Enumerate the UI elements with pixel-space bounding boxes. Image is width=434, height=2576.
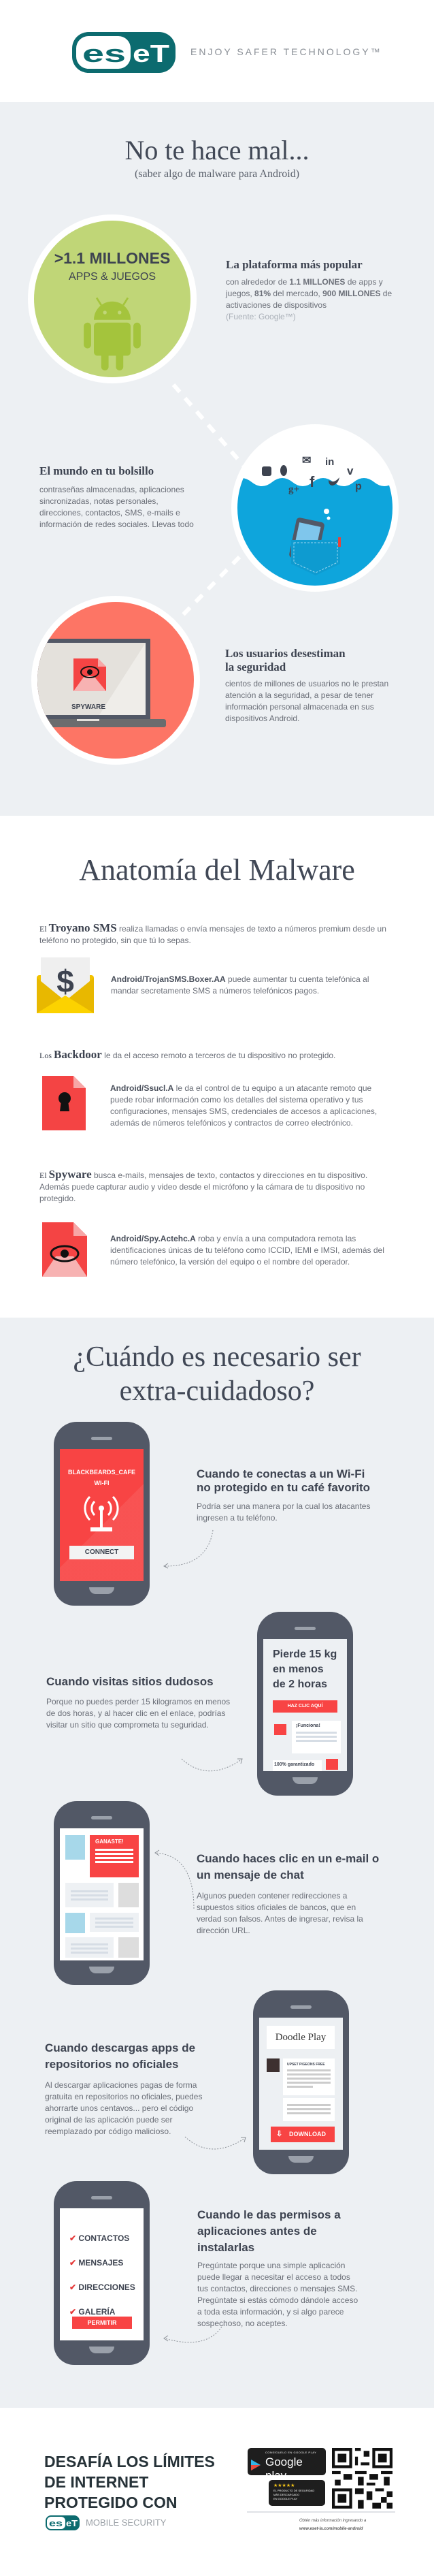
circle: pocket with social icons: ✉ <box>302 455 311 466</box>
text: repositorios: Cuando descargas apps de repositorios no oficiales <box>45 2041 195 2071</box>
title: Anatomía del Malware: Anatomía del Malware <box>79 853 355 887</box>
circle: spyware laptop <box>31 596 200 765</box>
logo badge: es <box>82 39 126 67</box>
footer url text: Obtén más información ingresando a <box>299 2519 366 2523</box>
phone 4: doodle play: ⇩ <box>276 2130 282 2138</box>
rating badge: ★★★★★ <box>273 2483 295 2488</box>
text: wifi <box>197 1467 370 1523</box>
footer: eset mobile security <box>46 2515 166 2530</box>
circle: android apps <box>28 214 197 383</box>
block: backdoor: Android/Ssucl.A le da el control de tu equipo a un atacante remoto que puede robar información como los detalles del sistema operativo y tus configuraciones, mensajes SMS, credenciales de accesos a aplicaciones, además de números telefónicos y contractos de correo electrónico. <box>110 1083 377 1128</box>
dashed connectors <box>172 383 243 616</box>
footer: headline: DE INTERNET <box>44 2473 148 2491</box>
circle: spyware laptop: SPYWARE <box>71 703 105 711</box>
text: email: Algunos pueden contener redirecciones a supuestos sitios oficiales de bancos, que en verdad son falsos. Antes de ingresar, revisa la dirección URL. <box>197 1891 363 1935</box>
google play badge: CONSÍGUELO EN GOOGLE PLAY <box>265 2451 316 2454</box>
circle: pocket with social icons: v <box>347 464 354 477</box>
title: cuando es necesario <box>73 1341 361 1407</box>
phone 2: sitios dudosos: ¡Funciona! <box>296 1723 320 1728</box>
phone 2: sitios dudosos: de 2 horas <box>273 1679 327 1690</box>
footer: headline <box>44 2453 215 2511</box>
block: spyware: Android/Spy.Actehc.A roba y envía a una computadora remota las identificaciones únicas de tu teléfono como ICCID, IEMI e IMSI, además del número telefónico, la versión del equipo o el nombre del operador. <box>110 1234 384 1267</box>
block: troyano sms: Android/TrojanSMS.Boxer.AA puede aumentar tu cuenta telefónica al mandar secretamente SMS a números telefónicos pagos. <box>111 974 369 996</box>
text: plataforma mas popular: (Fuente: Google™) <box>226 312 296 321</box>
phone 5: permisos: ✔ DIRECCIONES <box>69 2283 135 2292</box>
title: cuando es necesario: ¿Cuándo es necesario ser <box>73 1341 361 1373</box>
block: backdoor: Los Backdoor le da el acceso remoto a terceros de tu dispositivo no protegido. <box>39 1048 335 1061</box>
text: email <box>197 1852 379 1935</box>
text: permisos <box>197 2208 358 2328</box>
rating badge: EL PRODUCTO DE SEGURIDAD <box>273 2489 314 2492</box>
phone 5: permisos: ✔ MENSAJES <box>69 2258 123 2268</box>
icon: envelope with dollar: $ <box>56 964 74 999</box>
rating badge: EN GOOGLE PLAY <box>273 2497 297 2500</box>
phone 3: email: GANASTE! <box>95 1839 124 1845</box>
text: sitios dudosos: Porque no puedes perder 15 kilogramos en menos de dos horas, y al hacer clic en el enlace, podrías visitar un sitio que comprometa tu seguridad. <box>46 1697 230 1730</box>
text: sitios dudosos <box>46 1675 230 1730</box>
footer url text: www.eset-la.com/mobile-android <box>299 2527 363 2531</box>
title: No te hace mal: No te hace mal... <box>125 135 309 165</box>
phone 4: doodle play: Doodle Play <box>276 2032 326 2043</box>
qr code <box>332 2448 393 2509</box>
footer: eset mobile security: es <box>49 2518 63 2528</box>
phone 4: doodle play: UPSET PIGEONS FREE <box>287 2063 325 2067</box>
phone 1: wifi: WI-FI <box>94 1480 109 1486</box>
arrow 3 <box>154 1849 195 1909</box>
rating badge <box>269 2480 325 2506</box>
circle: pocket with social icons: p <box>355 481 362 492</box>
phone 1: wifi: CONNECT <box>85 1548 118 1556</box>
phone 2: sitios dudosos: 100% garantizado <box>274 1762 314 1767</box>
arrow 2 <box>181 1758 243 1772</box>
footer divider line <box>247 2511 395 2513</box>
icon: red file with keyhole <box>42 1076 86 1130</box>
footer url text <box>299 2518 366 2531</box>
circle: android apps: APPS & JUEGOS <box>69 271 156 283</box>
phone 2: sitios dudosos: Pierde 15 kg <box>273 1649 337 1660</box>
text: wifi: Podría ser una manera por la cual los atacantes ingresen a tu teléfono. <box>197 1501 370 1523</box>
text: wifi: Cuando te conectas a un Wi-Fi no protegido en tu café favorito <box>197 1467 370 1494</box>
section 1 background <box>0 102 434 816</box>
arrow 5 <box>163 2322 224 2342</box>
circle: android apps: >1.1 MILLONES <box>54 249 170 267</box>
text: usuarios desestiman: cientos de millones de usuarios no le prestan atención a la seguridad, a pesar de tener información personal almacenada en sus dispositivos Android. <box>225 679 388 723</box>
google play badge <box>248 2448 326 2475</box>
icon: envelope with dollar <box>37 957 94 1013</box>
footer: headline: PROTEGIDO CON <box>44 2494 178 2511</box>
text: mundo en tu bolsillo: contraseñas almacenadas, aplicaciones sincronizadas, notas personales, direcciones, contactos, SMS, e-mails e información de redes sociales. Llevas todo <box>39 485 194 529</box>
footer: headline: DESAFÍA LOS LÍMITES <box>44 2453 215 2470</box>
text: permisos: Pregúntate porque una simple aplicación puede llegar a necesitar el acceso a todos tus contactos, direcciones o mensajes SMS. Pregúntate si estás cómodo dándole acceso a toda esta información, y si algo parece sospechoso, no aceptes. <box>197 2261 358 2328</box>
text: usuarios desestiman: la seguridad <box>225 661 286 673</box>
phone 5: permisos: ✔ CONTACTOS <box>69 2233 129 2243</box>
footer: eset mobile security: eT <box>66 2518 78 2528</box>
android robot <box>84 298 141 370</box>
phone 5: permisos: PERMITIR <box>87 2319 117 2326</box>
circle: pocket with social icons: f <box>310 473 315 490</box>
header: eset logo <box>72 32 382 73</box>
phone 5: permisos: ✔ GALERÍA <box>69 2307 115 2317</box>
subtitle: (saber algo de malware para Android) <box>135 168 299 180</box>
block: troyano sms <box>37 921 386 1013</box>
text: sitios dudosos: Cuando visitas sitios dudosos <box>46 1675 214 1688</box>
circle: pocket with social icons: in <box>325 456 334 468</box>
rating badge: MÁS DESCARGADO <box>273 2493 299 2496</box>
phone 2: sitios dudosos: HAZ CLIC AQUÍ <box>288 1704 322 1708</box>
footer: eset mobile security: MOBILE SECURITY <box>86 2517 166 2528</box>
phone 1: wifi <box>54 1422 150 1606</box>
text: usuarios desestiman: Los usuarios desestiman <box>225 647 346 660</box>
block: backdoor <box>39 1048 377 1130</box>
block: troyano sms: El Troyano SMS realiza llamadas o envía mensajes de texto a números premium desde un teléfono no protegido, sin que tú lo sepas. <box>39 921 386 945</box>
title: cuando es necesario: extra-cuidadoso? <box>120 1376 314 1407</box>
text: email: Cuando haces clic en un e-mail o un mensaje de chat <box>197 1852 379 1881</box>
icon: red file with eye <box>42 1222 87 1277</box>
arrow 1 <box>163 1529 214 1569</box>
text: mundo en tu bolsillo <box>39 464 194 529</box>
text: plataforma mas popular <box>226 258 392 321</box>
logo badge <box>72 32 176 73</box>
text: plataforma mas popular: La plataforma más popular <box>226 258 363 271</box>
text: plataforma mas popular: con alrededor de 1.1 MILLONES de apps y juegos, 81% del mercado, 900 MILLONES de activaciones de dispositivos <box>226 277 392 310</box>
block: spyware <box>39 1168 384 1277</box>
text: mundo en tu bolsillo: El mundo en tu bolsillo <box>39 464 154 477</box>
arrow 4 <box>185 2137 246 2149</box>
text: repositorios: Al descargar aplicaciones pagas de forma gratuita en repositorios no oficiales, puedes ahorrarte unos centavos... pero el código original de las aplicación puede ser reemplazado por código malicioso. <box>45 2080 202 2136</box>
block: spyware: El Spyware busca e-mails, mensajes de texto, contactos y direcciones en tu dispositivo. Además puede capturar audio y video desde el micrófono y la cámara de tu dispositivo no protegido. <box>39 1168 367 1203</box>
google play badge: Google play <box>265 2455 303 2482</box>
phone 5: permisos <box>54 2181 150 2365</box>
text: usuarios desestiman <box>225 647 388 723</box>
phone 2: sitios dudosos <box>257 1612 353 1796</box>
section 3 background <box>0 1318 434 2408</box>
text: repositorios <box>45 2041 203 2136</box>
tagline: ENJOY SAFER TECHNOLOGY™ <box>190 46 382 57</box>
circle: pocket with social icons <box>231 424 399 592</box>
phone 4: doodle play: DOWNLOAD <box>289 2131 326 2137</box>
phone 3: email <box>54 1801 150 1985</box>
text: permisos: Cuando le das permisos a aplicaciones antes de instalarlas <box>197 2208 341 2254</box>
phone 1: wifi: BLACKBEARDS_CAFE <box>68 1469 135 1476</box>
phone 2: sitios dudosos: en menos <box>273 1664 324 1675</box>
circle: pocket with social icons: g+ <box>288 484 299 495</box>
phone 4: doodle play <box>253 1990 349 2174</box>
logo badge: eT <box>133 39 169 67</box>
